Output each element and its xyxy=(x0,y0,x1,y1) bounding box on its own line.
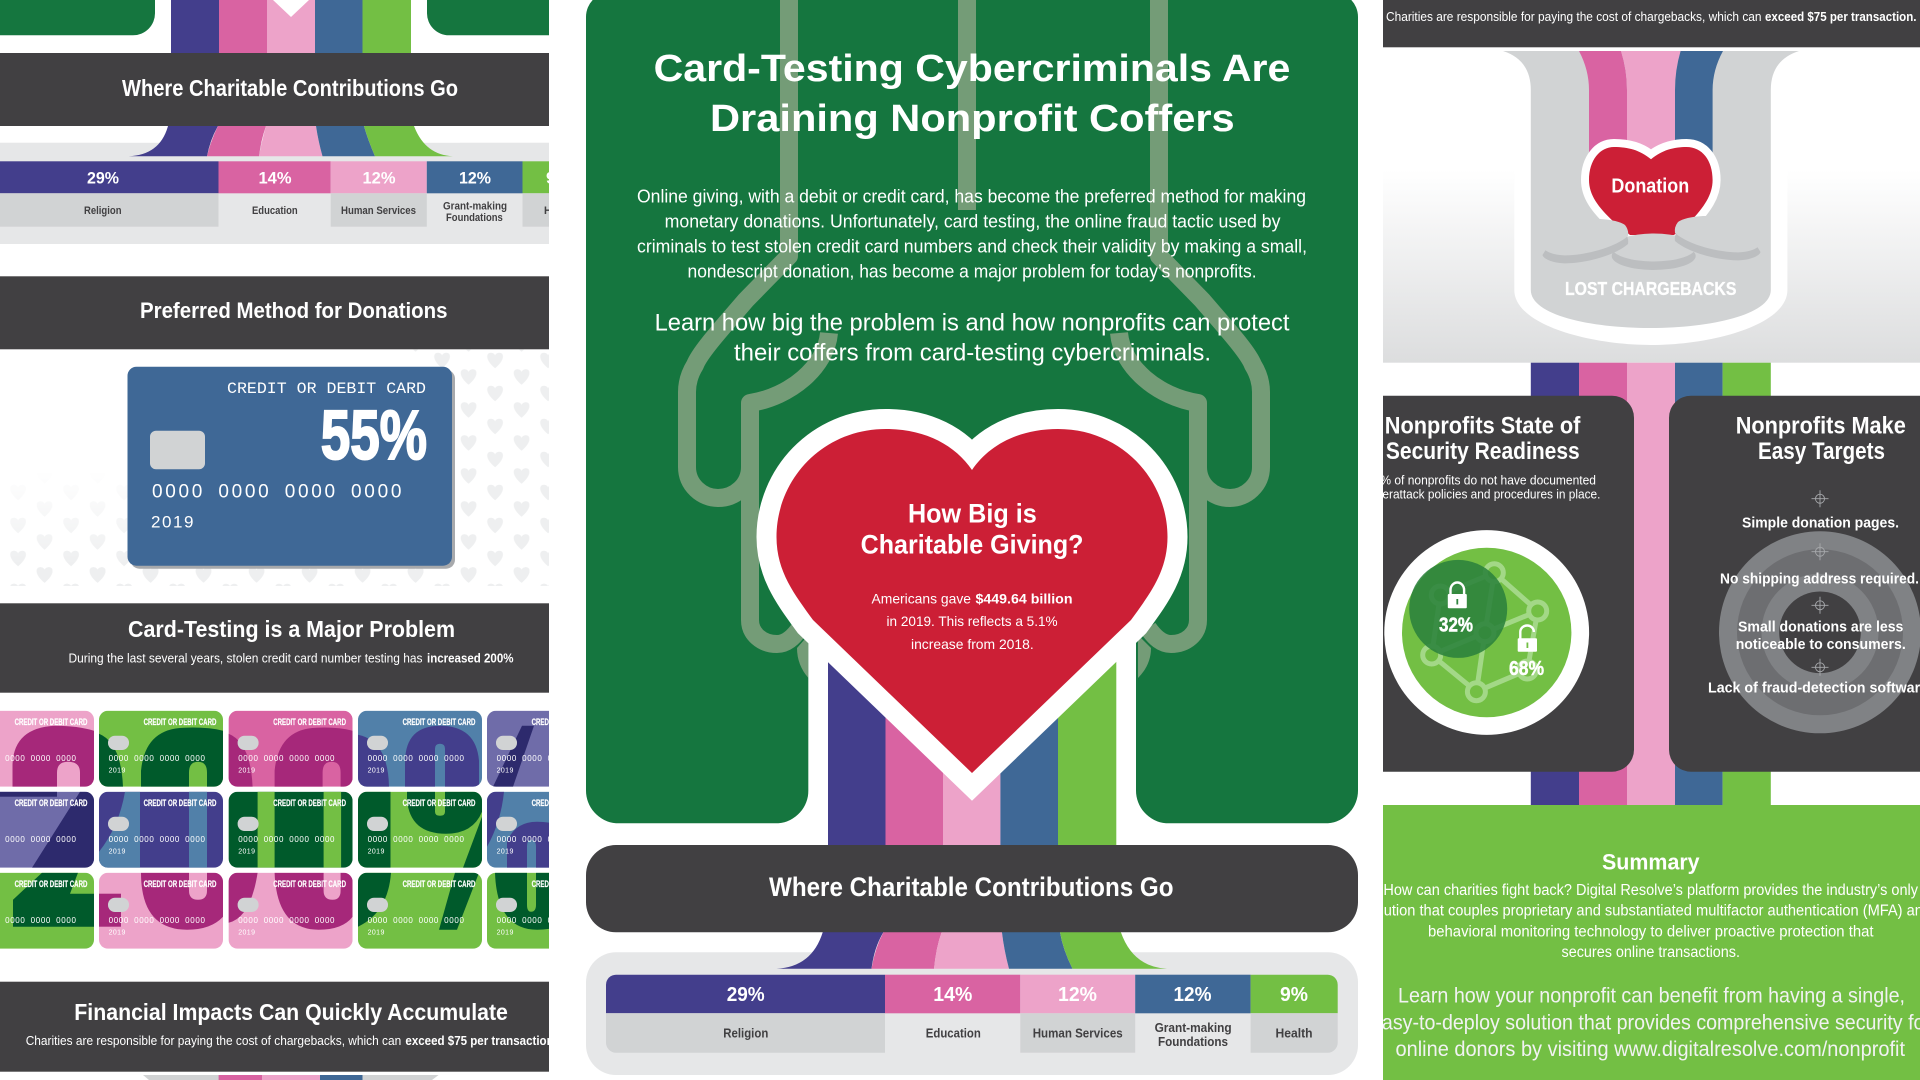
card row 3 col 2: 0000 0000 0000 0000 xyxy=(109,916,206,925)
heading bar: Preferred Method for Donations xyxy=(0,276,549,349)
category labels: Health xyxy=(1276,1026,1313,1040)
big red heart with text: Charitable Giving? xyxy=(861,529,1084,559)
lost chargebacks container xyxy=(1503,51,1799,345)
card row 1 col 3: 2019 xyxy=(238,768,255,775)
heading bar: Preferred Method for Donations: Preferred Method for Donations xyxy=(140,298,448,323)
card row 2 col 1 xyxy=(0,792,94,868)
card row 1 col 4 xyxy=(358,711,482,787)
card row 3 col 3 xyxy=(229,873,353,949)
category labels: Human Services xyxy=(1033,1026,1123,1040)
percent bars xyxy=(0,161,570,193)
card row 2 col 2: 2019 xyxy=(109,849,126,856)
card row 2 col 5: 2019 xyxy=(497,849,514,856)
panel: Nonprofits Make Easy Targets: Easy Targets xyxy=(1758,438,1885,465)
list of reasons xyxy=(1708,516,1920,697)
top of chargebacks funnel xyxy=(143,1075,439,1080)
colour stripes below heart xyxy=(828,640,1116,846)
card row 3 col 2 xyxy=(99,873,223,949)
intro paragraph: Online giving, with a debit or credit card, has become the preferred method for making xyxy=(637,187,1306,207)
card row 1 col 5: 2019 xyxy=(497,768,514,775)
card row 3 col 2: 2019 xyxy=(109,930,126,937)
big red heart with text: How Big is xyxy=(908,499,1037,529)
card row 3 col 3: 0000 0000 0000 0000 xyxy=(238,916,335,925)
card row 2 col 2: 0000 0000 0000 0000 xyxy=(109,835,206,844)
percent bars: 9% xyxy=(546,170,570,188)
card row 2 col 5 xyxy=(487,792,549,868)
intro paragraph: monetary donations. Unfortunately, card testing, the online fraud tactic used by xyxy=(665,212,1280,232)
card row 1 col 2: 2019 xyxy=(109,768,126,775)
category labels: Grant-making xyxy=(443,200,507,212)
card row 1 col 3: 0000 0000 0000 0000 xyxy=(238,754,335,763)
card row 1 col 4: 2019 xyxy=(368,768,385,775)
main title: Card-Testing Cybercriminals Are xyxy=(654,48,1290,90)
panel: Nonprofits Make Easy Targets: Nonprofits Make xyxy=(1736,412,1906,439)
panel: Summary: online donors by visiting www.digitalresolve.com/nonprofit xyxy=(1396,1038,1905,1061)
card row 1 col 2: CREDIT OR DEBIT CARD xyxy=(144,717,216,728)
category labels: Foundations xyxy=(1158,1034,1228,1049)
heading bar: Card-Testing is a Major Problem: increased 200% xyxy=(427,652,514,666)
icon: closed lock xyxy=(1448,583,1467,608)
heading bar: Where Charitable Contributions Go xyxy=(0,53,549,126)
category labels xyxy=(606,1013,1338,1053)
network graph xyxy=(1423,564,1547,701)
category labels: Health xyxy=(544,205,576,217)
card row 1 col 5: 0000 0000 0000 0000 xyxy=(497,754,594,763)
donation heart xyxy=(1589,147,1713,235)
heading bar: Financial Impacts: Charities are responsible for paying the cost of chargebacks, which can xyxy=(26,1034,401,1048)
right column: cropped infographic strip xyxy=(1364,0,1920,1080)
card row 1 col 4: CREDIT OR DEBIT CARD xyxy=(403,717,475,728)
percent bars: 9% xyxy=(1280,984,1308,1006)
heading bar: Financial Impacts: exceed $75 per transaction. xyxy=(405,1034,557,1048)
big red heart with text: increase from 2018. xyxy=(911,636,1034,652)
panel: Nonprofits State of Security Readiness: Nonprofits State of xyxy=(1385,412,1581,439)
donut and network chart: 32% xyxy=(1439,615,1473,637)
card row 2 col 2 xyxy=(99,792,223,868)
card row 3 col 5 xyxy=(487,872,549,949)
donation heart: Donation xyxy=(1611,175,1689,197)
percent bars xyxy=(606,975,1338,1013)
card row 2 col 3: 0000 0000 0000 0000 xyxy=(238,835,335,844)
card row 2 col 4: 2019 xyxy=(368,849,385,856)
list of reasons: Simple donation pages. xyxy=(1742,516,1899,532)
card row 2 col 4: 0000 0000 0000 0000 xyxy=(368,835,465,844)
card row 2 col 5: CREDIT OR DEBIT CARD xyxy=(532,798,604,809)
big red heart with text xyxy=(776,429,1168,773)
green panel remnants at top xyxy=(0,0,549,35)
left column: cropped infographic strip xyxy=(0,0,549,1080)
icon: open lock xyxy=(1518,626,1537,652)
percent bars: 29% xyxy=(727,984,765,1006)
heading bar: Card-Testing is a Major Problem xyxy=(0,603,549,693)
donut and network chart xyxy=(1384,530,1589,735)
card row 2 col 3: CREDIT OR DEBIT CARD xyxy=(273,798,346,809)
main title: Draining Nonprofit Coffers xyxy=(710,98,1235,140)
card row 1 col 1: CREDIT OR DEBIT CARD xyxy=(15,717,87,728)
card row 3 col 5: 2019 xyxy=(497,930,514,937)
card row 2 col 4: CREDIT OR DEBIT CARD xyxy=(403,798,475,809)
category labels: Religion xyxy=(84,205,122,217)
funnel xyxy=(120,126,460,156)
category labels: Grant-making xyxy=(1155,1020,1232,1035)
card row 1 col 3: CREDIT OR DEBIT CARD xyxy=(273,717,346,728)
credit card: 55%: CREDIT OR DEBIT CARD xyxy=(227,380,426,398)
credit card: 55%: 2019 xyxy=(151,513,195,532)
panel: Summary: secures online transactions. xyxy=(1562,944,1740,961)
card row 2 col 4 xyxy=(358,792,482,868)
donut and network chart: 68% xyxy=(1509,658,1544,680)
list of reasons: Small donations are less xyxy=(1738,620,1903,636)
heading bar remnant: chargebacks text xyxy=(1383,0,1920,47)
card row 3 col 5: 0000 0000 0000 0000 xyxy=(497,916,594,925)
card row 2 col 3: 2019 xyxy=(238,849,255,856)
intro paragraph xyxy=(637,187,1307,282)
card row 3 col 3: CREDIT OR DEBIT CARD xyxy=(273,879,346,890)
panel: Nonprofits State of Security Readiness xyxy=(1364,396,1634,772)
lost chargebacks container: LOST CHARGEBACKS xyxy=(1565,279,1736,299)
white channel behind stripes xyxy=(808,640,1136,846)
main title xyxy=(654,48,1290,140)
category labels: Education xyxy=(926,1026,981,1040)
percent bars: 14% xyxy=(933,984,973,1006)
percent bars: 29% xyxy=(87,170,119,188)
category labels: Religion xyxy=(723,1026,768,1040)
stripes flowing into heart xyxy=(1579,51,1723,152)
heart background pattern xyxy=(0,350,549,586)
panel: Summary: behavioral monitoring technology to deliver proactive protection that xyxy=(1428,923,1874,940)
card row 1 col 2: 0000 0000 0000 0000 xyxy=(109,754,206,763)
category labels xyxy=(0,193,576,227)
call to learn more: Learn how big the problem is and how nonprofits can protect xyxy=(655,310,1290,337)
heading bar: Where Charitable Contributions Go xyxy=(586,845,1358,932)
heading bar: Where Charitable Contributions Go: Where Charitable Contributions Go xyxy=(122,75,458,101)
card row 3 col 4: CREDIT OR DEBIT CARD xyxy=(403,879,475,890)
heading bar: Card-Testing is a Major Problem: During the last several years, stolen credit card number testing has xyxy=(68,652,422,666)
category labels: Foundations xyxy=(446,212,503,224)
category labels: Education xyxy=(252,205,298,217)
card row 1 col 3 xyxy=(229,711,353,787)
icon: crosshairs xyxy=(1812,490,1828,676)
list of reasons: noticeable to consumers. xyxy=(1736,637,1906,653)
heading bar: Financial Impacts: Financial Impacts Can Quickly Accumulate xyxy=(74,999,508,1025)
target rings xyxy=(1719,531,1920,733)
centre column: main hero panel xyxy=(586,0,1358,1075)
credit card: 55% xyxy=(128,367,455,569)
card row 2 col 3 xyxy=(229,792,353,868)
contributions panel xyxy=(0,126,576,244)
big red heart with text: Americans gave xyxy=(872,590,971,606)
panel: Nonprofits State of Security Readiness: Security Readiness xyxy=(1386,438,1580,465)
credit card: 55%: 55% xyxy=(321,396,427,474)
percent bars: 12% xyxy=(362,170,396,188)
heading bar: Financial Impacts xyxy=(0,982,557,1072)
big red heart with text: in 2019. This reflects a 5.1% xyxy=(886,613,1058,629)
card row 2 col 1: CREDIT OR DEBIT CARD xyxy=(15,798,87,809)
card row 3 col 4: 0000 0000 0000 0000 xyxy=(368,916,465,925)
call to learn more: their coffers from card-testing cybercriminals. xyxy=(734,340,1211,367)
percent bars: 12% xyxy=(1174,984,1212,1006)
light grey contributions panel xyxy=(586,952,1358,1075)
card row 1 col 2 xyxy=(99,711,223,787)
intro paragraph: nondescript donation, has become a major problem for today’s nonprofits. xyxy=(688,262,1257,282)
percent bars: 12% xyxy=(1058,984,1097,1006)
percent bars: 14% xyxy=(258,170,292,188)
panel: Summary: Summary xyxy=(1602,849,1700,874)
card row 2 col 2: CREDIT OR DEBIT CARD xyxy=(144,798,216,809)
card row 1 col 5 xyxy=(487,710,549,787)
credit card: 55%: 0000 0000 0000 0000 xyxy=(152,481,404,502)
colour stripes from heart xyxy=(171,0,411,54)
card row 3 col 1 xyxy=(0,873,94,949)
heading bar: Where Charitable Contributions Go: Where Charitable Contributions Go xyxy=(769,872,1174,902)
contributions funnel xyxy=(776,932,1167,969)
hands catching coins xyxy=(1542,216,1760,270)
hands outline illustration xyxy=(687,0,1261,678)
category labels: Human Services xyxy=(341,205,416,217)
intro paragraph: criminals to test stolen credit card numbers and check their validity by making a small, xyxy=(637,237,1307,257)
vertical colour stripes xyxy=(1531,363,1771,805)
card row 3 col 4 xyxy=(358,873,482,949)
percent bars: 12% xyxy=(459,170,491,188)
background gradient band xyxy=(1383,215,1920,363)
card row 1 col 4: 0000 0000 0000 0000 xyxy=(368,754,465,763)
card row 1 col 1 xyxy=(0,711,94,787)
panel: Nonprofits State of Security Readiness: cyberattack policies and procedures in place. xyxy=(1364,487,1600,501)
card row 3 col 5: CREDIT OR DEBIT CARD xyxy=(532,879,604,890)
card row 3 col 4: 2019 xyxy=(368,930,385,937)
green hero panel xyxy=(586,0,1358,823)
call to learn more xyxy=(655,310,1290,367)
card row 2 col 5: 0000 0000 0000 0000 xyxy=(497,835,594,844)
panel: Nonprofits Make Easy Targets xyxy=(1669,396,1920,772)
heading bar remnant: chargebacks text: Charities are responsible for paying the cost of chargebacks, which can xyxy=(1386,10,1762,24)
heading bar: Card-Testing is a Major Problem: Card-Testing is a Major Problem xyxy=(128,616,455,642)
card row 3 col 2: CREDIT OR DEBIT CARD xyxy=(144,879,216,890)
panel: Summary xyxy=(1365,805,1920,1080)
card row 3 col 1: CREDIT OR DEBIT CARD xyxy=(15,879,87,890)
card row 3 col 3: 2019 xyxy=(238,930,255,937)
panel: Nonprofits State of Security Readiness: 68% of nonprofits do not have documented xyxy=(1367,473,1596,487)
card grid forming 2019 xyxy=(0,711,611,949)
card row 1 col 5: CREDIT OR DEBIT CARD xyxy=(532,717,604,728)
big red heart with text: $449.64 billion xyxy=(976,590,1072,606)
